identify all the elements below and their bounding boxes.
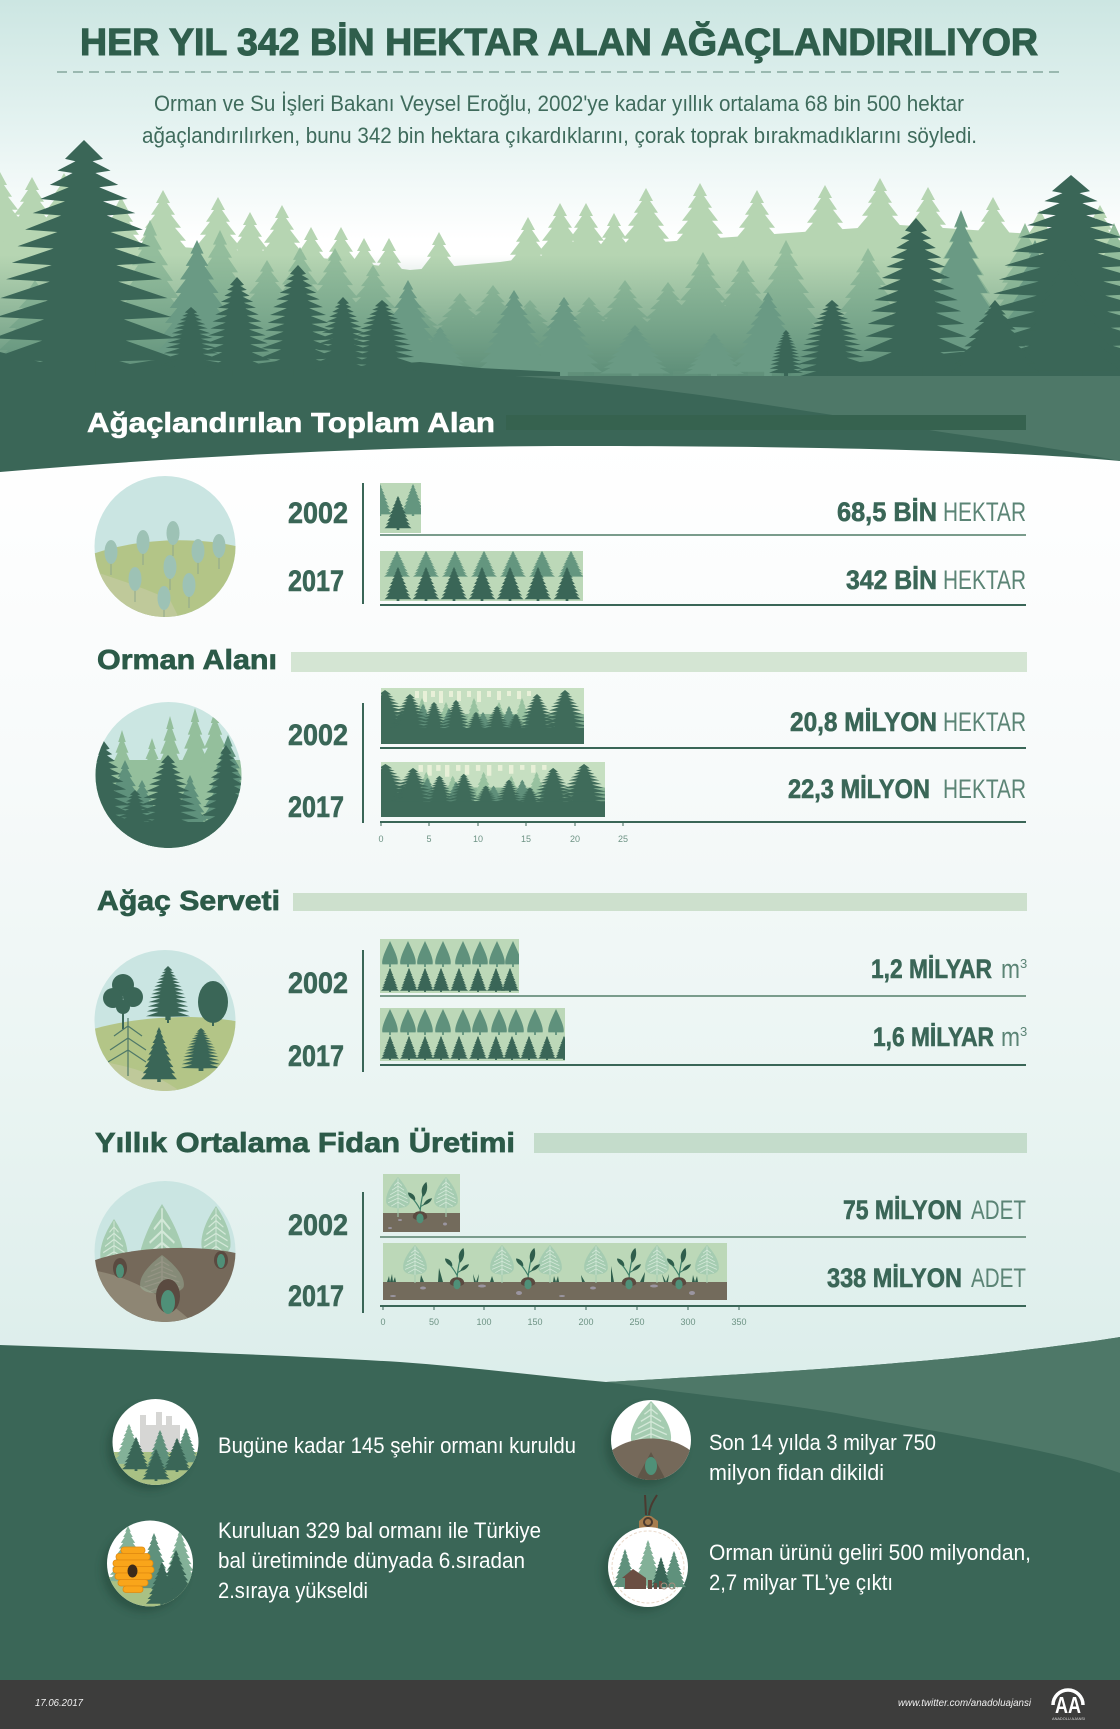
twitter url: www.twitter.com/anadoluajansi	[898, 1698, 1032, 1709]
value 338 milyon adet: 338 MİLYON	[827, 1263, 962, 1293]
text: 2.sıraya yükseldi	[218, 1578, 368, 1603]
text: Kuruluan 329 bal ormanı ile Türkiye	[218, 1518, 541, 1543]
x axis ticks and labels: 200	[578, 1317, 594, 1327]
mid tree layer	[0, 211, 1120, 376]
heading bar	[293, 893, 1027, 911]
baselines	[380, 534, 1026, 606]
x axis ticks and labels: 50	[429, 1317, 439, 1327]
value 1,2 milyar m3: m	[1001, 954, 1020, 984]
year axis	[362, 1192, 364, 1313]
2002 label: 2002	[288, 967, 348, 1000]
value 342 bin hektar: HEKTAR	[943, 565, 1026, 595]
value 22,3 milyon hektar: HEKTAR	[943, 774, 1026, 804]
intro text: ağaçlandırılırken, bunu 342 bin hektara çıkardıklarını, çorak toprak bırakmadıklarını söyledi.	[142, 123, 977, 148]
value 22,3 milyon hektar: 22,3 MİLYON	[788, 774, 930, 804]
value 68,5 bin hektar: 68,5 BİN	[837, 497, 937, 527]
section 2: forest area	[70, 644, 1027, 850]
x axis ticks and labels: 10	[473, 834, 483, 844]
x axis ticks and labels: 0	[380, 1317, 386, 1327]
heading bar	[291, 652, 1027, 672]
heading bar	[506, 415, 1026, 430]
bottom light accent	[606, 1337, 1120, 1473]
value 342 bin hektar	[846, 565, 1026, 595]
fact: city forests	[107, 1399, 576, 1490]
x axis ticks and labels: 250	[629, 1317, 645, 1327]
2002 label: 2002	[288, 497, 348, 530]
bottom haze	[0, 255, 1120, 376]
baselines	[380, 1236, 1026, 1307]
value 1,6 milyar m3: m	[1001, 1022, 1020, 1052]
text: Orman ürünü geliri 500 milyondan,	[709, 1540, 1031, 1565]
x axis ticks and labels: 350	[731, 1317, 747, 1327]
value 1,2 milyar m3: 3	[1020, 956, 1027, 971]
bar 2017	[380, 1008, 573, 1061]
logo: Anadolu Agency: AA	[1055, 1692, 1081, 1718]
intro text: Orman ve Su İşleri Bakanı Veysel Eroğlu, 2002'ye kadar yıllık ortalama 68 bin 500 hektar	[154, 91, 964, 116]
x axis ticks and labels: 0	[378, 834, 384, 844]
value 1,6 milyar m3: 3	[1020, 1024, 1027, 1039]
text: bal üretiminde dünyada 6.sıradan	[218, 1548, 525, 1573]
light tree layer	[0, 172, 1120, 376]
x axis ticks and labels	[378, 823, 628, 844]
2002 label: 2002	[288, 719, 348, 752]
value 75 milyon adet: 75 MİLYON	[843, 1195, 962, 1225]
intro text	[142, 91, 977, 148]
x axis ticks and labels: 20	[570, 834, 580, 844]
text	[709, 1430, 936, 1485]
page background: body	[0, 440, 1120, 1400]
icon: ornament with house and trees	[602, 1495, 688, 1612]
text: 2,7 milyar TL’ye çıktı	[709, 1570, 893, 1595]
icon: city forest	[107, 1399, 199, 1490]
2002 label: 2002	[288, 1209, 348, 1242]
heading: Yıllık Ortalama Fidan Üretimi	[95, 1127, 515, 1158]
icon: beehive forest	[102, 1520, 197, 1612]
fact: forest product income	[602, 1495, 1031, 1612]
value 20,8 milyon hektar: 20,8 MİLYON	[790, 707, 937, 737]
x axis ticks and labels: 5	[426, 834, 432, 844]
value 342 bin hektar: 342 BİN	[846, 565, 937, 595]
bar 2002	[383, 1174, 460, 1232]
date: 17.06.2017	[35, 1698, 83, 1709]
bar 2002	[380, 939, 521, 993]
value 68,5 bin hektar: HEKTAR	[943, 497, 1026, 527]
section 1: total afforested area	[87, 407, 1026, 621]
circle icon: young trees on hill	[94, 476, 236, 617]
circle icon: dense forest	[96, 702, 242, 848]
text: Bugüne kadar 145 şehir ormanı kuruldu	[218, 1433, 576, 1458]
circle icon: seedlings in soil	[94, 1181, 236, 1322]
heading: Orman Alanı	[97, 644, 277, 675]
dashed divider	[57, 71, 1063, 73]
fact: honey forests	[102, 1518, 541, 1612]
heading: Ağaç Serveti	[97, 885, 280, 916]
heading bar	[534, 1133, 1027, 1153]
baselines	[380, 995, 1026, 1066]
x axis ticks and labels: 15	[521, 834, 531, 844]
x axis ticks and labels: 150	[527, 1317, 543, 1327]
value 338 milyon adet: ADET	[971, 1263, 1026, 1293]
value 20,8 milyon hektar	[790, 707, 1026, 737]
circle icon: tree species	[94, 950, 236, 1091]
2017 label: 2017	[288, 1040, 344, 1073]
value 68,5 bin hektar	[837, 497, 1026, 527]
baselines	[380, 747, 1026, 823]
2017 label: 2017	[288, 791, 344, 824]
x axis ticks and labels: 25	[618, 834, 628, 844]
2017 label: 2017	[288, 565, 344, 598]
page background: sky	[0, 0, 1120, 240]
section 4: annual seedling production	[90, 1127, 1027, 1327]
x axis ticks and labels: 100	[476, 1317, 492, 1327]
section 3: tree stock	[90, 885, 1027, 1095]
value 22,3 milyon hektar	[788, 774, 1026, 804]
x axis ticks and labels: 300	[680, 1317, 696, 1327]
x axis ticks and labels	[380, 1307, 747, 1327]
value 1,2 milyar m3: 1,2 MİLYAR	[871, 954, 992, 984]
value 1,6 milyar m3: 1,6 MİLYAR	[873, 1022, 994, 1052]
bar 2017	[380, 551, 584, 601]
fact: seedlings planted	[605, 1399, 936, 1486]
text: milyon fidan dikildi	[709, 1460, 884, 1485]
value 20,8 milyon hektar: HEKTAR	[943, 707, 1026, 737]
2017 label: 2017	[288, 1280, 344, 1313]
heading: Ağaçlandırılan Toplam Alan	[87, 407, 495, 438]
medium tree layer	[150, 210, 1080, 376]
light band accent	[515, 376, 1120, 461]
logo: Anadolu Agency: ANADOLU AJANSI	[1052, 1716, 1085, 1721]
text	[218, 1518, 541, 1603]
icon: seedling	[605, 1399, 692, 1486]
year axis	[362, 703, 364, 823]
value 75 milyon adet: ADET	[971, 1195, 1026, 1225]
title: HER YIL 342 BİN HEKTAR ALAN AĞAÇLANDIRILIYOR	[80, 20, 1038, 64]
dark header band	[0, 376, 1120, 472]
bar 2017	[352, 762, 613, 817]
year axis	[362, 483, 364, 604]
text	[709, 1540, 1031, 1595]
bottom dark panel	[0, 1337, 1120, 1680]
forest illustration	[0, 140, 1120, 376]
text: Son 14 yılda 3 milyar 750	[709, 1430, 936, 1455]
bar 2017	[383, 1243, 727, 1300]
dark tree layer	[0, 140, 1120, 376]
bar 2002	[355, 688, 591, 744]
bar 2002	[380, 483, 421, 533]
year axis	[362, 950, 364, 1072]
footer bar	[0, 1680, 1120, 1729]
